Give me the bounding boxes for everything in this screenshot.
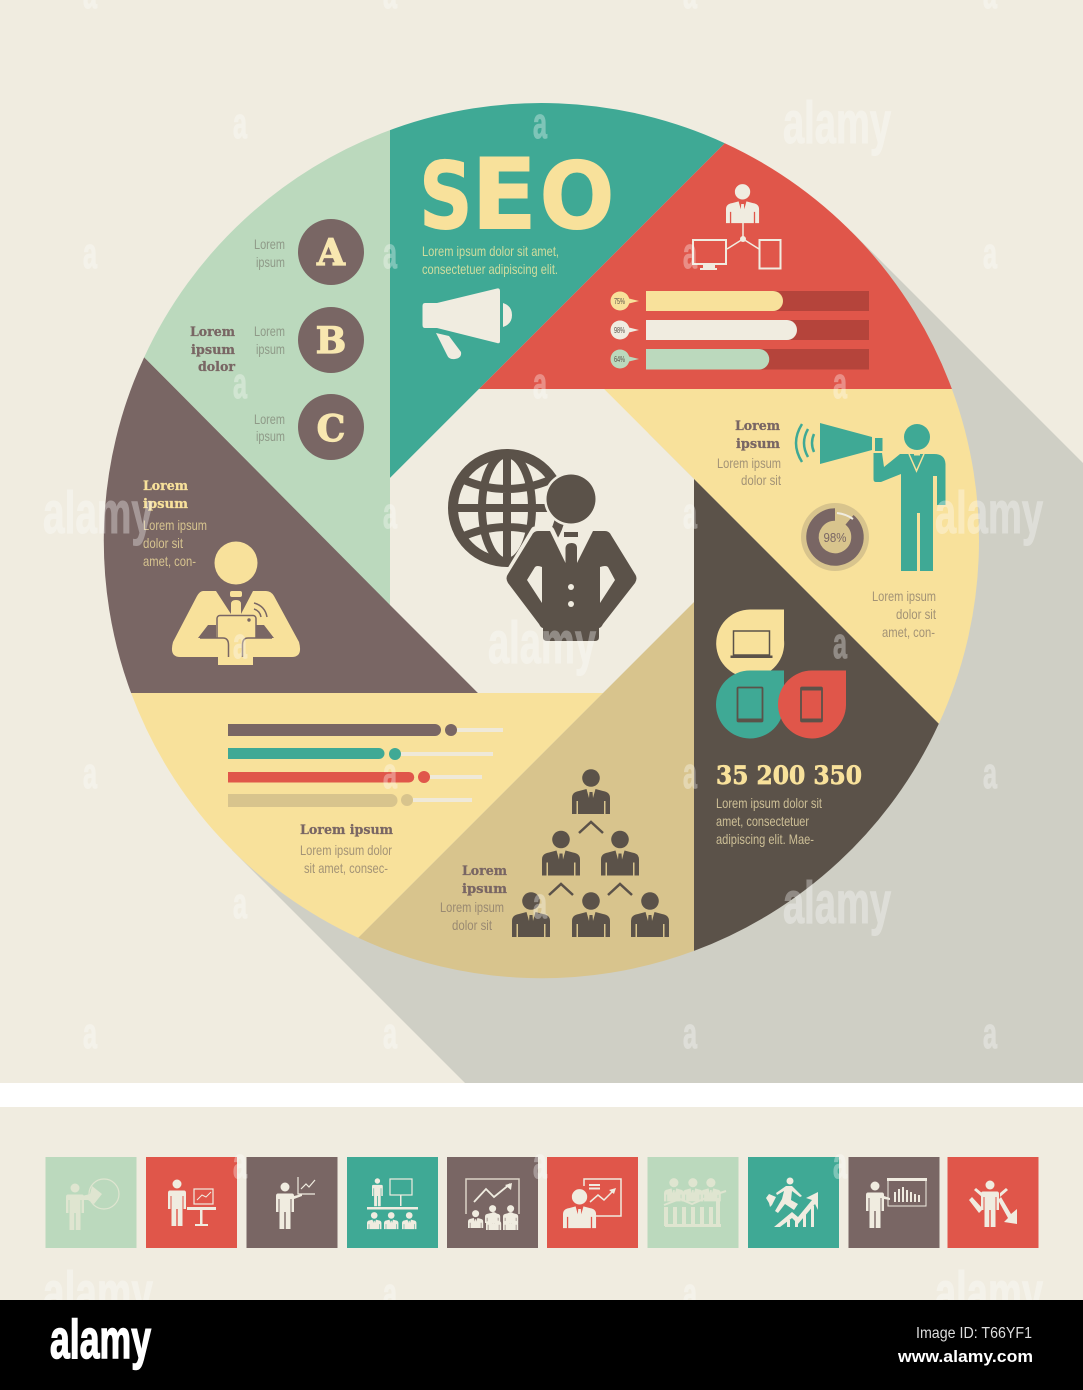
text block: heading and description: Lorem xyxy=(735,419,780,434)
tile 10: man with falling arrow xyxy=(948,1157,1038,1248)
long shadow of the circle xyxy=(232,231,1083,1083)
donut chart: 98%: 98% xyxy=(824,530,847,545)
text block: hierarchy description: dolor sit xyxy=(452,917,492,933)
heading: SEO: S xyxy=(419,142,473,250)
tile 9: man with falling bar chart xyxy=(848,1157,940,1248)
footer logo: alamy: alamy xyxy=(50,1308,151,1370)
text block: Lorem ipsum dolor xyxy=(190,325,235,375)
text block: option labels: Lorem xyxy=(254,236,285,252)
watermarks: a xyxy=(533,99,547,148)
footer url: www.alamy.com xyxy=(897,1347,1033,1366)
text block: lower description: amet, con- xyxy=(882,624,935,640)
panel: SEO teal segment xyxy=(390,103,725,478)
panel: lower-left yellow segment xyxy=(131,693,603,938)
tile 6: businessman with board xyxy=(547,1157,638,1248)
white band xyxy=(0,1083,1083,1107)
text block: chart caption: Lorem ipsum dolor xyxy=(300,842,392,858)
text block: mauve description: amet, con- xyxy=(143,553,196,569)
watermarks: a xyxy=(233,1139,247,1188)
text block: chart caption: Lorem ipsum xyxy=(300,823,393,838)
numbers: 35 200 350: 35 200 350 xyxy=(716,761,862,790)
watermarks: a xyxy=(683,489,697,538)
text block: SEO description: Lorem ipsum dolor sit amet, xyxy=(422,243,559,259)
watermarks: a xyxy=(383,1269,397,1318)
watermarks: a xyxy=(83,749,97,798)
heading: SEO: E xyxy=(471,138,537,252)
text block: option labels: ipsum xyxy=(256,341,285,357)
icon: person holding tablet xyxy=(172,542,300,665)
watermarks: a xyxy=(983,1009,997,1058)
text block: mauve description: dolor sit xyxy=(143,535,183,551)
badge: C xyxy=(298,394,364,460)
tile 3: man with line chart xyxy=(246,1157,338,1248)
badge: B: B xyxy=(316,320,346,362)
text block: heading and description: dolor sit xyxy=(741,472,781,488)
tile 1: man with pie chart xyxy=(46,1157,136,1248)
bar chart: three progress bars xyxy=(610,291,869,370)
watermarks: a xyxy=(833,359,847,408)
icon: megaphone xyxy=(422,288,512,359)
watermarks: a xyxy=(533,879,547,928)
text block: heading and description xyxy=(717,419,781,488)
text block: Lorem ipsum dolor: ipsum xyxy=(191,343,235,358)
watermarks: a xyxy=(833,619,847,668)
icon: phone teardrop xyxy=(778,670,846,739)
icon: hierarchy of people xyxy=(512,769,669,937)
donut chart: 98% xyxy=(801,503,869,571)
text block: chart caption: sit amet, consec- xyxy=(304,860,388,876)
icon: network of person and devices xyxy=(693,184,780,270)
text block: mauve description xyxy=(143,479,207,569)
watermarks: alamy xyxy=(783,90,891,156)
text block: SEO description: consectetuer adipiscing elit. xyxy=(422,261,558,277)
watermarks: a xyxy=(233,619,247,668)
watermarks: alamy xyxy=(43,480,153,546)
bar chart: four horizontal bars xyxy=(228,724,503,807)
watermarks: a xyxy=(233,359,247,408)
watermarks: a xyxy=(233,879,247,928)
tile 2: man at desk with monitor xyxy=(146,1157,237,1248)
text block: heading and description: ipsum xyxy=(736,437,780,452)
text block: lower description: dolor sit xyxy=(896,606,936,622)
text block: devices description: amet, consectetuer xyxy=(716,813,809,829)
watermarks: a xyxy=(683,749,697,798)
watermarks: a xyxy=(533,1139,547,1188)
panel: right yellow segment xyxy=(604,389,979,724)
icon: man with loudspeaker xyxy=(796,423,946,571)
text block: hierarchy description: Lorem ipsum xyxy=(440,899,504,915)
icon: globe xyxy=(452,453,562,563)
text block: mauve description: ipsum xyxy=(143,497,188,512)
text block: hierarchy description xyxy=(440,864,507,933)
icon: businessman xyxy=(506,474,636,641)
text block: devices description: adipiscing elit. Mae- xyxy=(716,831,814,847)
tile 5: chart board with audience xyxy=(447,1157,538,1248)
text block: option labels: Lorem xyxy=(254,323,285,339)
text block: hierarchy description: ipsum xyxy=(462,882,507,897)
watermarks: alamy xyxy=(43,1260,153,1326)
watermarks: a xyxy=(683,1269,697,1318)
watermarks: a xyxy=(533,359,547,408)
text block: lower description: Lorem ipsum xyxy=(872,588,936,604)
badge: B xyxy=(298,307,364,373)
panel: central octagon xyxy=(390,389,694,693)
tile 8: runner with rising arrow xyxy=(748,1157,839,1248)
watermarks: a xyxy=(383,229,397,278)
text block: option labels: Lorem xyxy=(254,411,285,427)
badge: A xyxy=(298,219,364,285)
text block: SEO description xyxy=(422,243,559,277)
watermarks: alamy xyxy=(488,610,596,676)
watermarks: a xyxy=(983,229,997,278)
text block: heading and description: Lorem ipsum xyxy=(717,455,781,471)
tile 4: presenter with audience xyxy=(347,1157,438,1248)
heading: SEO xyxy=(419,138,614,252)
text block: option labels: ipsum xyxy=(256,428,285,444)
watermarks: a xyxy=(383,489,397,538)
watermarks: alamy xyxy=(783,870,891,936)
badge: C: C xyxy=(317,408,345,450)
watermarks: a xyxy=(233,99,247,148)
text block: devices description xyxy=(716,795,822,847)
text block: hierarchy description: Lorem xyxy=(462,864,507,879)
text block: mauve description: Lorem xyxy=(143,479,188,494)
icon: laptop teardrop xyxy=(716,610,784,677)
watermarks: a xyxy=(383,749,397,798)
panel: light green ABC segment xyxy=(144,130,390,605)
panel: red segment xyxy=(479,143,952,389)
text block: Lorem ipsum dolor: dolor xyxy=(198,360,235,375)
watermarks: a xyxy=(683,229,697,278)
bar chart: three progress bars: 64% xyxy=(614,355,625,364)
watermarks: a xyxy=(383,1009,397,1058)
panel: tan hierarchy segment xyxy=(358,602,694,978)
text block: lower description xyxy=(872,588,936,640)
footer image id: Image ID: T66YF1 xyxy=(916,1325,1032,1342)
watermarks: a xyxy=(683,1009,697,1058)
bar chart: three progress bars: 98% xyxy=(614,326,625,335)
panel: mauve segment xyxy=(104,357,478,693)
badge: A: A xyxy=(316,232,346,274)
text block: Lorem ipsum dolor: Lorem xyxy=(190,325,235,340)
footer bar xyxy=(0,1300,1083,1390)
text block: mauve description: Lorem ipsum xyxy=(143,517,207,533)
watermarks: a xyxy=(83,1009,97,1058)
bar chart: three progress bars: 75% xyxy=(614,297,625,306)
text block: chart caption xyxy=(300,823,393,876)
watermarks: a xyxy=(983,749,997,798)
text block: option labels: ipsum xyxy=(256,254,285,270)
tile 7: team on rising bars xyxy=(648,1157,738,1248)
watermarks: a xyxy=(83,229,97,278)
panel: dark devices segment xyxy=(694,479,939,951)
heading: SEO: O xyxy=(540,143,614,251)
icon: tablet teardrop xyxy=(716,670,784,739)
text block: option labels xyxy=(254,236,285,444)
text block: devices description: Lorem ipsum dolor sit xyxy=(716,795,822,811)
watermarks: a xyxy=(833,1139,847,1188)
